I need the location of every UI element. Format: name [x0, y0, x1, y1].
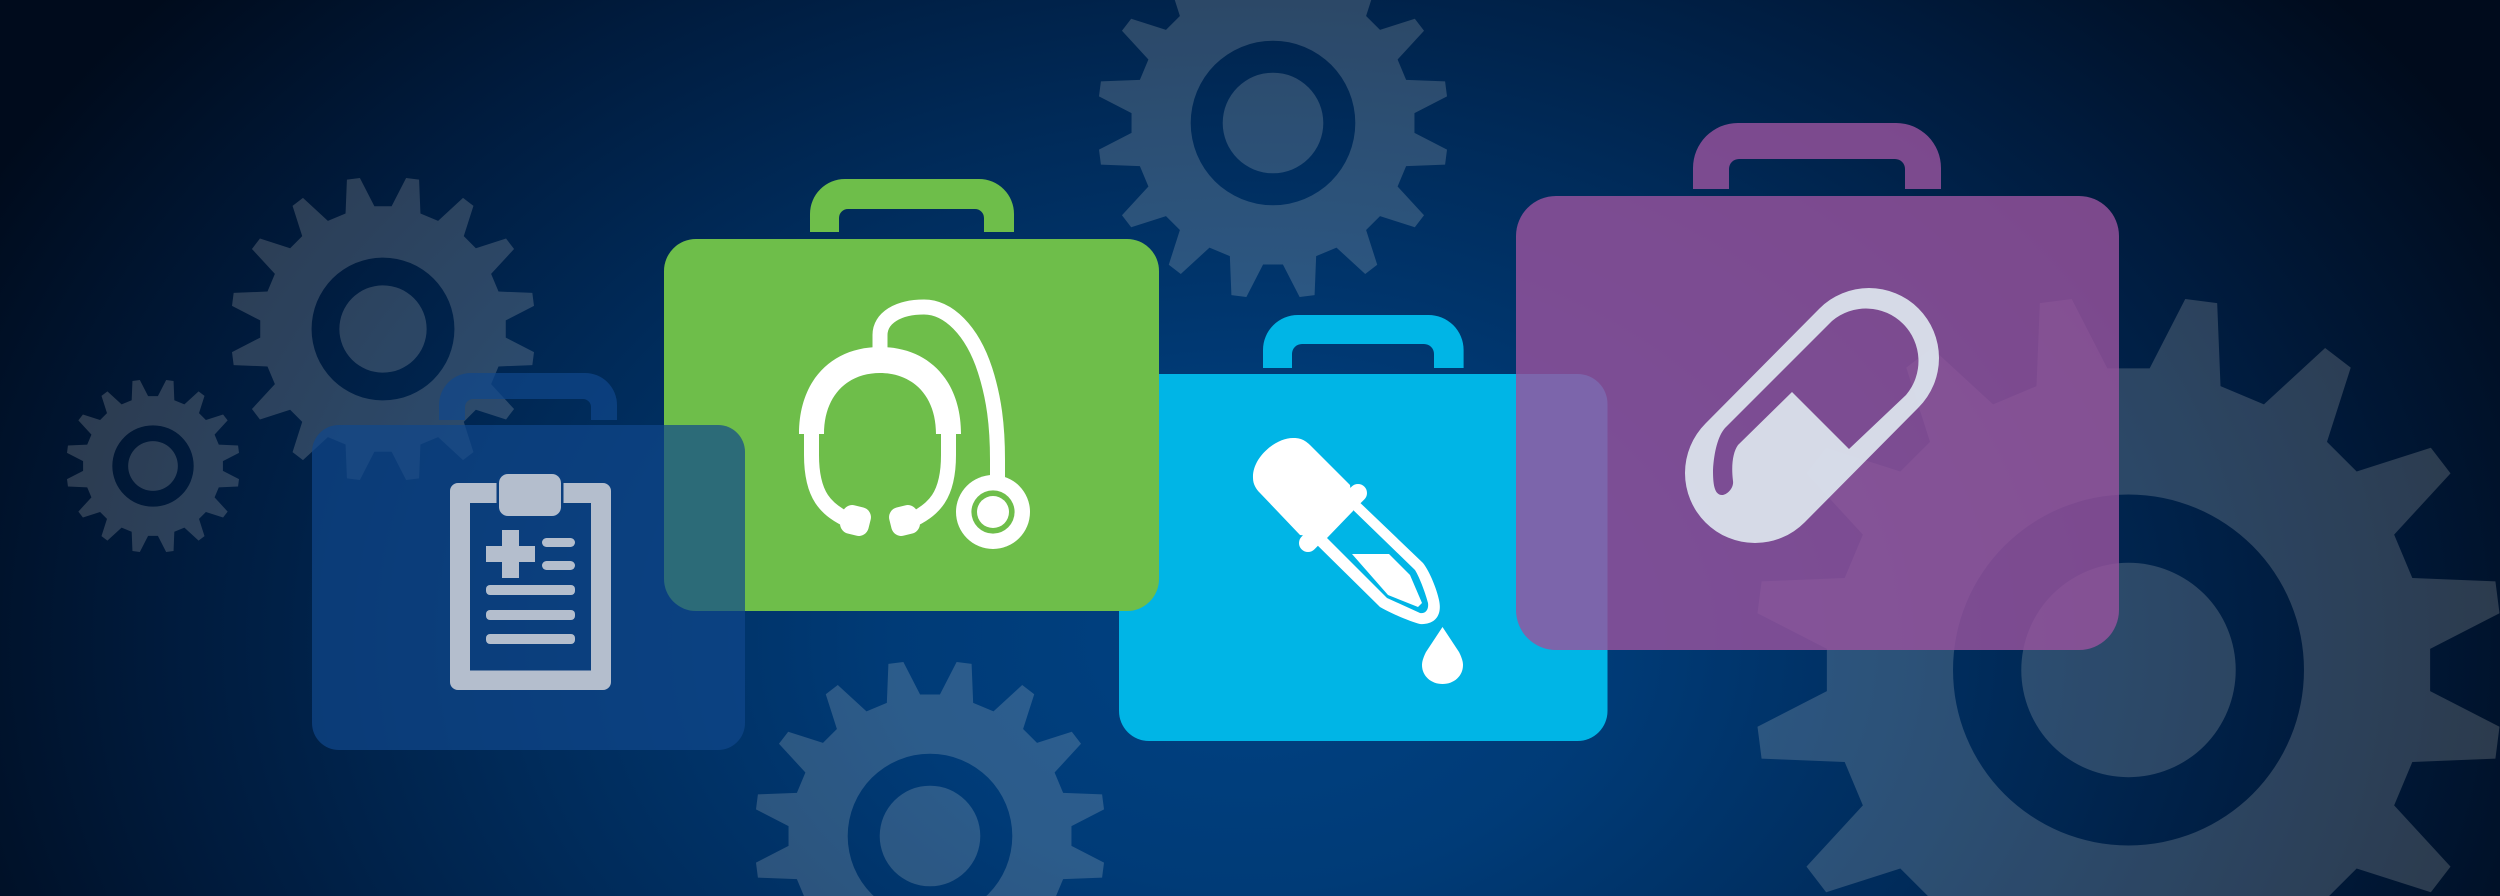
icon: dropper	[1253, 438, 1463, 684]
blue case handle	[439, 373, 617, 420]
purple case body	[1516, 196, 2119, 650]
clipboard clip	[499, 474, 561, 516]
purple case handle	[1693, 123, 1941, 189]
icon: clipboard	[450, 474, 611, 690]
clipboard text lines	[486, 538, 575, 644]
dropper collar	[1308, 493, 1358, 543]
chest piece	[956, 475, 1030, 549]
case: cyan dropper case	[1119, 315, 1608, 741]
left earpiece	[838, 503, 873, 538]
medical cross	[486, 530, 535, 578]
right earpiece	[887, 503, 922, 538]
dropper glass tube	[1310, 495, 1440, 624]
clipboard board	[450, 483, 611, 690]
green case handle	[810, 179, 1014, 232]
dropper bulb	[1253, 438, 1353, 538]
dropper liquid	[1352, 554, 1422, 607]
gear: small far left	[67, 380, 239, 552]
green case body	[664, 239, 1159, 611]
case: blue clipboard case	[312, 373, 745, 750]
icon: stethoscope	[799, 307, 1030, 549]
blue case body	[312, 425, 745, 750]
gear: top centre	[1093, 0, 1453, 303]
case: green stethoscope case	[664, 179, 1159, 611]
case: purple pill case	[1516, 123, 2119, 650]
cyan case body	[1119, 374, 1608, 741]
gear: bottom centre	[750, 655, 1110, 896]
stethoscope tubes	[812, 307, 998, 522]
falling drop	[1422, 627, 1463, 684]
gear: medium left	[232, 178, 534, 480]
stethoscope headband	[799, 347, 961, 434]
gear: large right	[1750, 290, 2500, 896]
icon: pill capsule	[1685, 288, 1939, 543]
cyan case handle	[1263, 315, 1464, 368]
